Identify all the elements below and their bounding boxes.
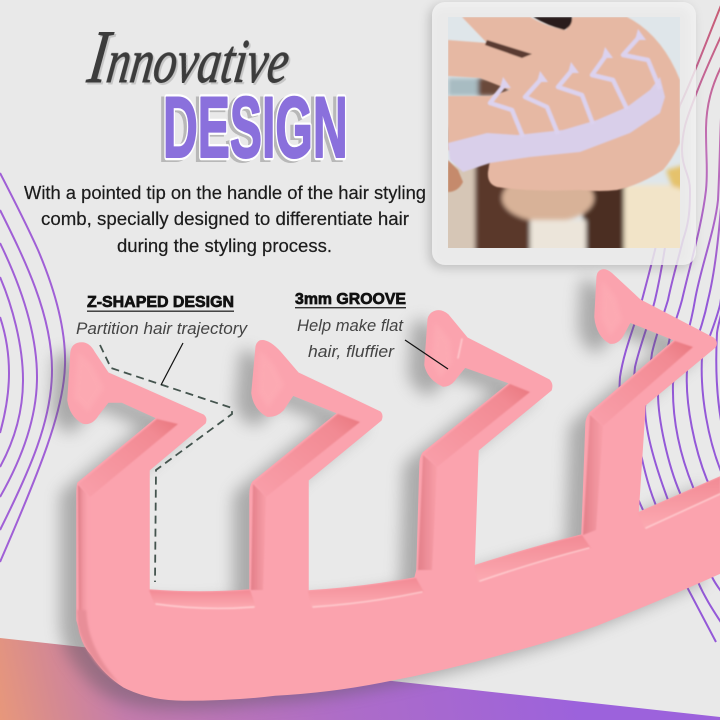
description paragraph bbox=[24, 183, 426, 256]
label: 3mm groove: Help make flat bbox=[297, 316, 404, 335]
comb in photo bbox=[448, 29, 665, 172]
description paragraph: comb, specially designed to differentiate hair bbox=[41, 209, 409, 229]
title bbox=[83, 14, 348, 178]
trajectory dashed line bbox=[100, 345, 232, 582]
comb shadow bbox=[51, 279, 703, 709]
photo of comb on hand bbox=[440, 17, 686, 255]
label: z-shaped design: Z-SHAPED DESIGN bbox=[87, 294, 234, 311]
hand bbox=[448, 17, 680, 192]
label: z-shaped design bbox=[76, 294, 248, 338]
comb lower left edge bbox=[77, 610, 120, 684]
leader line: groove bbox=[405, 340, 448, 369]
description paragraph: With a pointed tip on the handle of the hair styling bbox=[24, 183, 426, 203]
label: z-shaped design: Partition hair trajectory bbox=[76, 319, 248, 338]
title block word: DESIGN bbox=[163, 79, 348, 176]
comb highlights bbox=[156, 339, 720, 608]
title block word: DESIGN bbox=[163, 79, 348, 176]
photo card bbox=[432, 2, 696, 265]
left wave lines bbox=[0, 173, 65, 562]
comb silhouette bbox=[68, 270, 720, 700]
diagonal arm faces bbox=[79, 341, 693, 497]
pink comb bbox=[68, 270, 720, 700]
title script word: Innovative bbox=[83, 14, 296, 99]
description paragraph: during the styling process. bbox=[117, 236, 332, 256]
tooth heads shading bbox=[74, 280, 622, 412]
card frame bbox=[432, 2, 696, 265]
gap bottom bevels bbox=[149, 477, 720, 608]
purple gradient floor bbox=[0, 638, 720, 720]
label: 3mm groove: hair, fluffier bbox=[308, 342, 395, 361]
title block word: DESIGN bbox=[160, 81, 344, 178]
right wave lines bbox=[619, 3, 720, 642]
stem edges bbox=[78, 415, 603, 640]
leader line: z-shaped bbox=[161, 343, 183, 385]
label: 3mm groove: 3mm GROOVE bbox=[295, 291, 406, 308]
label: 3mm groove bbox=[295, 291, 406, 361]
